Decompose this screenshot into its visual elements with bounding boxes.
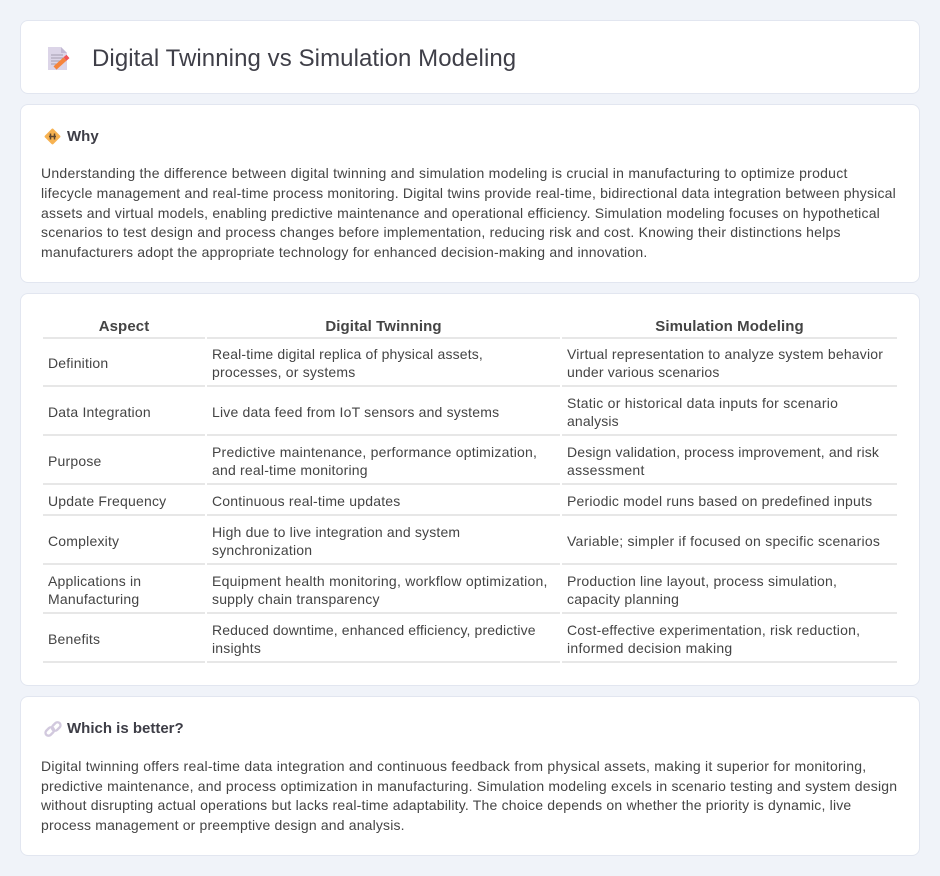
panel: which is better — [20, 696, 920, 856]
row: purpose: Design validation, process improvement, and risk — [567, 444, 879, 460]
row: complexity: Variable; simpler if focused on specific scenarios — [567, 533, 880, 549]
table header: Simulation Modeling — [655, 318, 804, 335]
row: applications in manufacturing: Production line layout, process simulation, — [567, 573, 837, 589]
row: purpose — [48, 444, 879, 478]
row: data integration: Static or historical data inputs for scenario — [567, 395, 838, 411]
row: data integration: Live data feed from IoT sensors and systems — [212, 404, 499, 420]
text: which is better paragraph: process management or preemptive design and analysis. — [41, 817, 405, 833]
row: complexity: synchronization — [212, 542, 312, 558]
text: which is better paragraph — [41, 758, 897, 833]
table header — [99, 318, 804, 335]
row: applications in manufacturing: Equipment health monitoring, workflow optimization, — [212, 573, 548, 589]
row: applications in manufacturing: capacity planning — [567, 591, 679, 607]
row: complexity: Complexity — [48, 533, 119, 549]
row: purpose: and real-time monitoring — [212, 462, 368, 478]
text: which is better paragraph: predictive maintenance, and process optimization in manufacturing. Simulation modeling excels in scenario testing and system design — [41, 778, 897, 794]
row: purpose: assessment — [567, 462, 645, 478]
table header: Digital Twinning — [325, 318, 442, 335]
row: definition: processes, or systems — [212, 364, 355, 380]
row: update frequency: Continuous real-time updates — [212, 493, 400, 509]
text: which is better paragraph: Digital twinning offers real-time data integration and continuous feedback from physical assets, making it superior for monitoring, — [41, 758, 866, 774]
heading: which is better: Which is better? — [67, 720, 184, 737]
row: purpose: Purpose — [48, 453, 102, 469]
row: benefits: insights — [212, 640, 261, 656]
row: definition — [48, 346, 883, 380]
table header: Aspect — [99, 318, 149, 335]
icon: warning diamond — [44, 128, 60, 144]
row: benefits: Cost-effective experimentation, risk reduction, — [567, 622, 860, 638]
row: applications in manufacturing: supply chain transparency — [212, 591, 380, 607]
icon: document with pencil — [48, 47, 70, 70]
title: Digital Twinning vs Simulation Modeling — [92, 45, 516, 72]
text: why paragraph: lifecycle management and real-time process monitoring. Digital twins provide real-time, bidirectional data integration between physical — [41, 185, 896, 201]
row: data integration — [48, 395, 838, 429]
header card — [20, 20, 920, 94]
row: definition: Real-time digital replica of physical assets, — [212, 346, 483, 362]
row: definition: Virtual representation to analyze system behavior — [567, 346, 883, 362]
row: purpose: Predictive maintenance, performance optimization, — [212, 444, 537, 460]
heading: why: Why — [67, 128, 99, 145]
text: why paragraph: scenarios to test design and process changes before implementation, reducing risk and cost. Knowing their distinctions helps — [41, 224, 841, 240]
row: update frequency: Update Frequency — [48, 493, 166, 509]
text: why paragraph — [41, 165, 896, 260]
text: why paragraph: manufacturers adopt the appropriate technology for enhanced decision-making and innovation. — [41, 244, 647, 260]
panel: why — [20, 104, 920, 283]
row: applications in manufacturing: Manufacturing — [48, 591, 139, 607]
row: data integration: Data Integration — [48, 404, 151, 420]
row: update frequency — [48, 493, 872, 509]
panel: comparison table — [20, 293, 920, 686]
row: benefits — [48, 622, 860, 656]
row: data integration: analysis — [567, 413, 619, 429]
row: definition: under various scenarios — [567, 364, 720, 380]
text: which is better paragraph: without disrupting actual operations but lacks real-time adaptability. The choice depends on whether the priority is dynamic, live — [41, 797, 851, 813]
row: update frequency: Periodic model runs based on predefined inputs — [567, 493, 872, 509]
row: benefits: Benefits — [48, 631, 100, 647]
row: definition: Definition — [48, 355, 108, 371]
row: complexity: High due to live integration and system — [212, 524, 460, 540]
text: why paragraph: assets and virtual models, enabling predictive maintenance and operational efficiency. Simulation modeling focuses on hypothetical — [41, 205, 880, 221]
row: complexity — [48, 524, 880, 558]
row: benefits: informed decision making — [567, 640, 732, 656]
icon: chain link — [44, 721, 62, 737]
row: applications in manufacturing: Applications in — [48, 573, 141, 589]
text: why paragraph: Understanding the difference between digital twinning and simulation modeling is crucial in manufacturing to optimize product — [41, 165, 848, 181]
row: applications in manufacturing — [48, 573, 837, 607]
row: benefits: Reduced downtime, enhanced efficiency, predictive — [212, 622, 536, 638]
